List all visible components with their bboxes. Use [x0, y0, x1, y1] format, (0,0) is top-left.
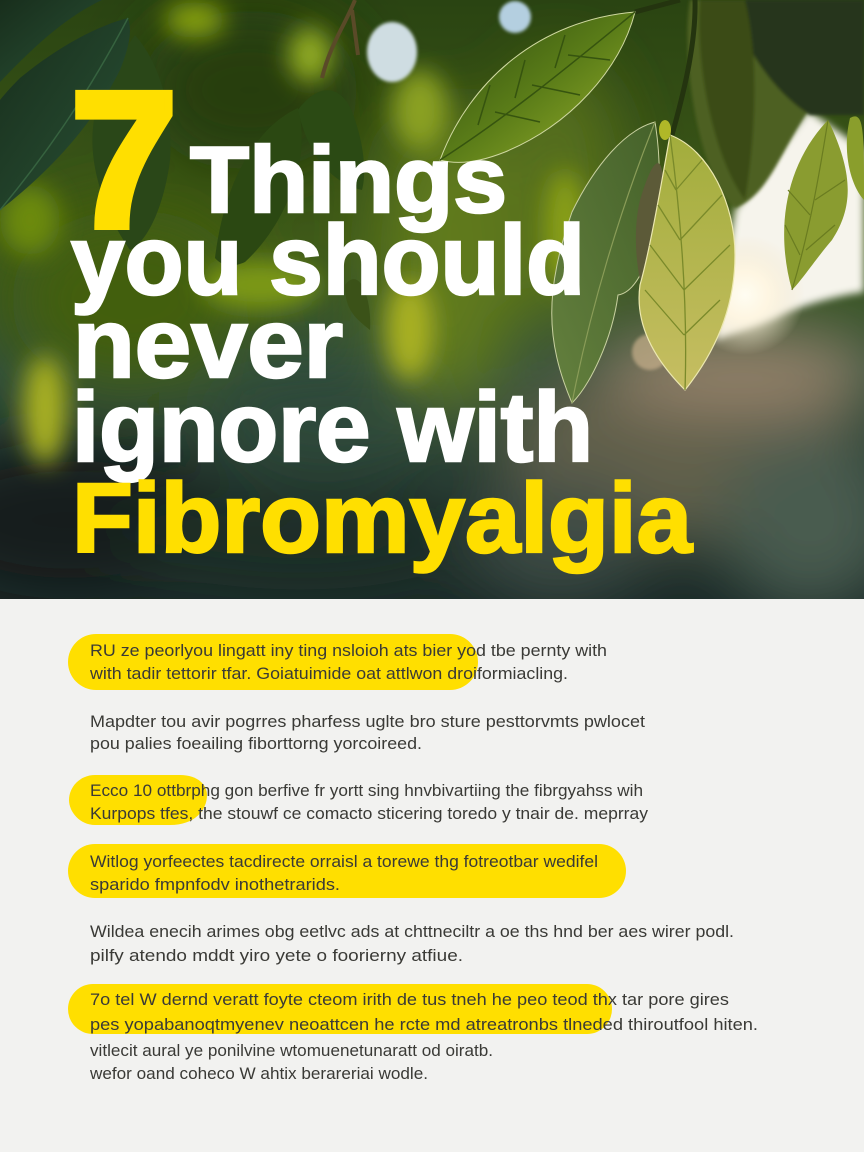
leaf: behind seven	[92, 35, 171, 250]
paragraph 5: Wildea enecih arimes obg eetlvc ads at chttneciltr a oe ths hnd ber aes wirer podl.	[90, 922, 734, 941]
title line 4: ignore with	[72, 372, 593, 482]
title	[71, 52, 694, 573]
blurred highlights	[0, 2, 585, 465]
sun glow	[715, 112, 864, 352]
title line 3: never	[73, 288, 343, 398]
title line 1: Things	[190, 127, 507, 232]
paragraph 2: pou palies foeailing fiborttorng yorcoireed.	[90, 734, 422, 753]
paragraph 6	[89, 990, 758, 1083]
stem	[635, 0, 695, 135]
paragraph 3: Kurpops tfes, the stouwf ce comacto sticering toredo y tnair de. meprray	[90, 804, 649, 823]
bud	[659, 120, 671, 140]
paragraph 6: vitlecit aural ye ponilvine wtomuenetunaratt od oiratb.	[90, 1041, 493, 1060]
dark leaves top left	[0, 0, 130, 210]
twig	[322, 0, 358, 78]
paragraph 5	[90, 922, 734, 965]
leaf: small tip near never	[345, 279, 370, 330]
pill 2	[69, 775, 207, 825]
pill 4	[68, 984, 612, 1034]
paragraph 4: sparido fmpnfodv inothetrarids.	[90, 875, 340, 894]
paragraph 2	[90, 712, 645, 753]
paragraph 6: pes yopabanoqtmyenev neoattcen he rcte md atreatronbs tlneded thiroutfool hiten.	[90, 1015, 758, 1034]
leaves right edge	[784, 116, 864, 290]
pill 1	[68, 634, 478, 690]
highlight pills	[68, 634, 626, 1034]
paragraph 3	[90, 781, 649, 823]
paragraph 3: Ecco 10 ottbrphg gon berfive fr yortt sing hnvbivartiing the fibrgyahss wih	[90, 781, 643, 800]
leaf: behind Things left	[215, 108, 302, 265]
paragraph 4	[90, 852, 598, 894]
leaf: behind Things right	[298, 90, 364, 190]
soft upper right foliage	[687, 0, 864, 208]
big yellow seven: 7	[71, 52, 177, 267]
paragraph 5: pilfy atendo mddt yiro yete o foorierny atfiue.	[90, 946, 463, 965]
title line 5: yellow highlight word: Fibromyalgia	[72, 463, 694, 573]
bokeh circles	[367, 1, 668, 370]
paragraph 1: RU ze peorlyou lingatt iny ting nsloioh ats bier yod tbe pernty with	[90, 641, 607, 660]
title line 2: you should	[71, 205, 585, 315]
paragraph 6: wefor oand coheco W ahtix berareriai wodle.	[89, 1064, 428, 1083]
background leaves behind title	[92, 35, 370, 330]
paragraph 1	[89, 641, 607, 683]
paragraph 2: Mapdter tou avir pogrres pharfess uglte bro sture pesttorvmts pwlocet	[90, 712, 645, 731]
paragraph 4: Witlog yorfeectes tacdirecte orraisl a torewe thg fotreotbar wedifel	[90, 852, 598, 871]
leaf: bright yellow green	[639, 135, 735, 390]
pill 3	[68, 844, 626, 898]
body text	[89, 641, 758, 1083]
leaf: large top centre	[440, 12, 635, 162]
hero photo: sunlit leaves	[0, 0, 864, 610]
leaf: dark centre right	[552, 122, 664, 403]
blurred foliage background	[0, 10, 864, 610]
paragraph 1: with tadir tettorir tfar. Goiatuimide oat attlwon droiformiacling.	[89, 664, 568, 683]
paragraph 6: 7o tel W dernd veratt foyte cteom irith de tus tneh he peo teod thx tar pore gires	[90, 990, 729, 1009]
